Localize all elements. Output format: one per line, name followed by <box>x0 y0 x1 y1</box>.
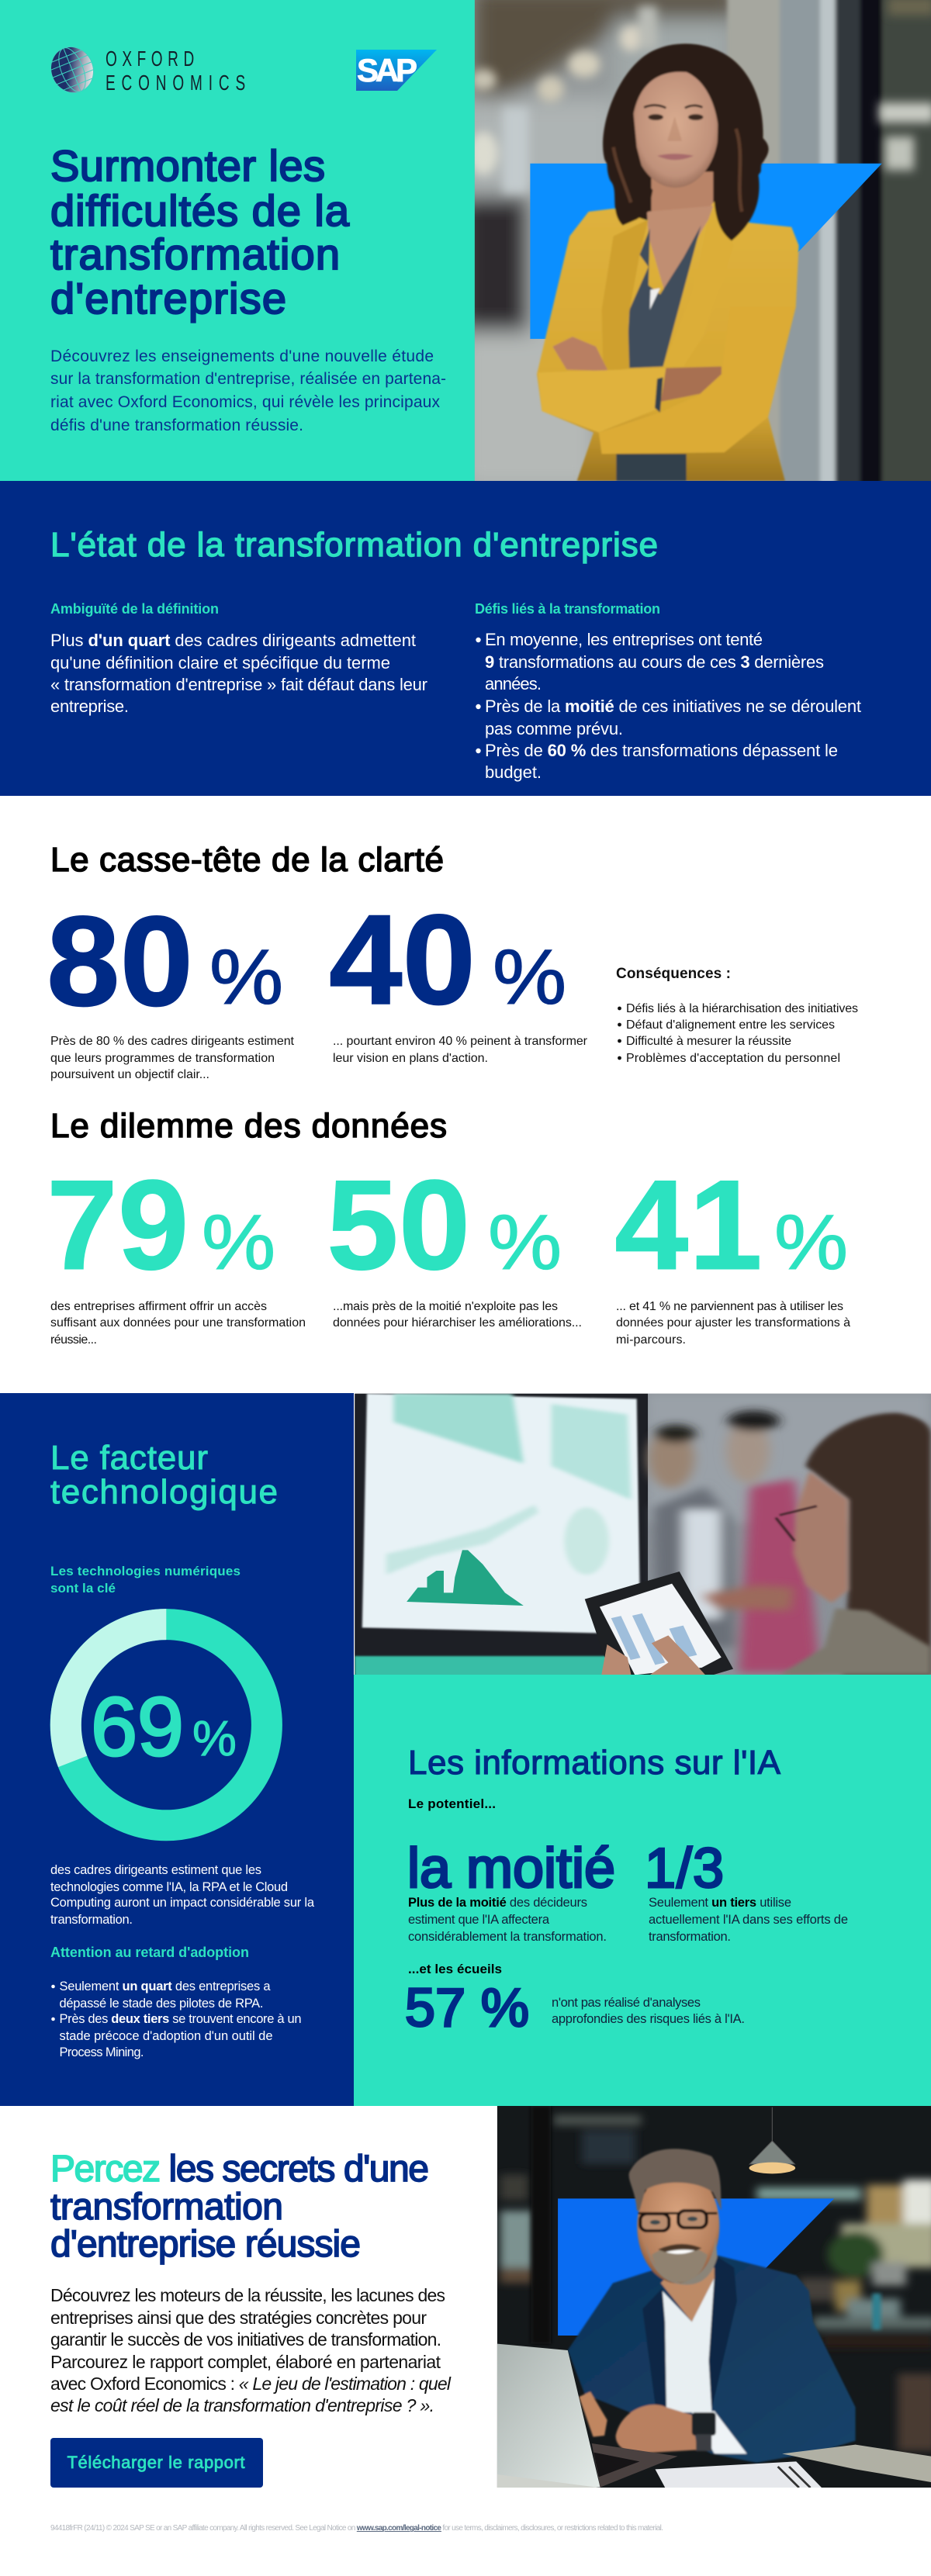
column: transformation challenges <box>475 601 861 782</box>
heading <box>50 2149 429 2265</box>
panel: clarity puzzle <box>47 841 858 1081</box>
caption: 50 % <box>333 1300 582 1329</box>
stat: one third: transformation. <box>649 1930 731 1944</box>
stat: 40 %: % <box>493 933 566 1020</box>
column: transformation challenges: années. <box>485 674 542 693</box>
body text: avec Oxford Economics : « Le jeu de l'estimation : quel <box>50 2374 452 2394</box>
photo: woman in yellow jacket <box>475 0 931 481</box>
stat: half: la moitié <box>407 1838 615 1900</box>
caption: 80 %: Près de 80 % des cadres dirigeants estiment <box>50 1035 295 1048</box>
body text <box>50 2285 452 2415</box>
heading: Les informations sur l'IA <box>408 1744 781 1782</box>
donut chart: 69 % <box>66 1624 267 1825</box>
body text: Découvrez les moteurs de la réussite, les lacunes des <box>50 2285 445 2305</box>
heading: Le facteur <box>50 1439 208 1477</box>
panel: state of transformation <box>0 481 931 796</box>
stat: 41 %: 41 <box>614 1153 763 1296</box>
stat: half: estiment que l'IA affectera <box>408 1913 550 1927</box>
title: Surmonter les <box>50 141 325 190</box>
caption: 80 %: poursuivent un objectif clair... <box>50 1068 209 1081</box>
stat: one third: actuellement l'IA dans ses efforts de <box>649 1913 848 1927</box>
stat: half <box>407 1838 615 1944</box>
caption: 79 %: suffisant aux données pour une transformation <box>50 1316 306 1329</box>
consequences list <box>616 966 858 1065</box>
adoption warning: Process Mining. <box>59 2045 144 2059</box>
consequences list: Défis liés à la hiérarchisation des initiatives <box>626 1002 858 1015</box>
stat: 80 % <box>47 890 283 1032</box>
consequences list: Défaut d'alignement entre les services <box>626 1018 835 1032</box>
column: transformation challenges: En moyenne, les entreprises ont tenté <box>485 630 763 649</box>
stat: 79 % <box>47 1153 275 1296</box>
logo: Oxford Economics: OXFORD <box>106 47 194 71</box>
stat: 80 %: 80 <box>47 890 193 1032</box>
stat: 79 %: % <box>202 1198 275 1285</box>
panel: data dilemma <box>47 1107 850 1347</box>
caption: 41 %: mi-parcours. <box>616 1333 686 1347</box>
donut description: des cadres dirigeants estiment que les <box>50 1863 261 1877</box>
accent: blue SAP wedge <box>530 164 882 339</box>
stat: 57 %: n'ont pas réalisé d'analyses <box>552 1996 701 2010</box>
stat: 41 %: % <box>774 1198 848 1285</box>
donut chart: 69 %: % <box>192 1710 237 1766</box>
logo: Oxford Economics <box>44 40 245 99</box>
column: definition ambiguity <box>50 601 427 716</box>
heading: L'état de la transformation d'entreprise <box>50 526 658 564</box>
stat: one third <box>645 1838 848 1944</box>
caption: 50 %: ...mais près de la moitié n'exploite pas les <box>333 1300 558 1313</box>
subheading: Les technologies numériques <box>50 1564 241 1578</box>
donut description: Computing auront un impact considérable sur la <box>50 1896 315 1910</box>
caption: 41 % <box>616 1300 850 1347</box>
stat: one third: 1/3 <box>645 1838 724 1900</box>
column: definition ambiguity: Ambiguïté de la définition <box>50 601 219 617</box>
caption: 50 %: données pour hiérarchiser les améliorations... <box>333 1316 582 1329</box>
column: transformation challenges: Défis liés à la transformation <box>475 601 660 617</box>
body text: garantir le succès de vos initiatives de transformation. <box>50 2329 441 2350</box>
column: transformation challenges: pas comme prévu. <box>485 719 623 738</box>
adoption warning: Seulement un quart des entreprises a <box>59 1980 271 1993</box>
title: transformation <box>50 230 340 278</box>
intro text: sur la transformation d'entreprise, réalisée en partena- <box>50 370 446 388</box>
stat: 41 % <box>614 1153 848 1296</box>
caption: 41 %: ... et 41 % ne parviennent pas à utiliser les <box>616 1300 843 1313</box>
donut chart: 69 %: 69 <box>91 1679 184 1773</box>
subheading <box>50 1564 241 1596</box>
footer legal note: 94418frFR (24/11) © 2024 SAP SE or an SAP affiliate company. All rights reserved. See Legal Notice on www.sap.com/legal-notice for use terms, disclaimers, disclosures, or restrictions related to this material. <box>50 2524 663 2533</box>
adoption warning: stade précoce d'adoption d'un outil de <box>59 2029 273 2043</box>
donut description <box>50 1863 315 1927</box>
donut description: transformation. <box>50 1913 133 1927</box>
column: transformation challenges: Près de 60 % des transformations dépassent le <box>485 741 838 760</box>
subheading: potential: Le potentiel... <box>408 1796 496 1811</box>
caption: 41 %: données pour ajuster les transformations à <box>616 1316 850 1329</box>
heading: Le casse-tête de la clarté <box>50 841 444 879</box>
column: transformation challenges: budget. <box>485 762 542 782</box>
donut description: technologies comme l'IA, la RPA et le Cloud <box>50 1880 288 1894</box>
adoption warning <box>50 1945 301 2059</box>
stat: half: Plus de la moitié des décideurs <box>408 1896 587 1910</box>
column: transformation challenges: Près de la moitié de ces initiatives ne se déroulent <box>485 697 861 716</box>
button: Télécharger le rapport <box>67 2453 245 2472</box>
stat: 50 % <box>327 1154 562 1297</box>
heading <box>50 1439 278 1511</box>
photo: smiling man with laptop <box>497 2106 931 2488</box>
heading: Percez les secrets d'une <box>50 2149 429 2190</box>
heading: technologique <box>50 1473 278 1511</box>
caption: 40 %: leur vision en plans d'action. <box>333 1052 488 1065</box>
body text: Parcourez le rapport complet, élaboré en partenariat <box>50 2352 441 2372</box>
intro text: défis d'une transformation réussie. <box>50 417 303 434</box>
intro text: Découvrez les enseignements d'une nouvelle étude <box>50 348 434 365</box>
body text: entreprises ainsi que des stratégies concrètes pour <box>50 2308 427 2328</box>
stat: one third: Seulement un tiers utilise <box>649 1896 791 1910</box>
title: difficultés de la <box>50 186 350 235</box>
stat: half: considérablement la transformation. <box>408 1930 607 1944</box>
panel: technology factor <box>0 1393 354 2106</box>
logo: Oxford Economics: ECONOMICS <box>106 71 245 95</box>
heading: Le dilemme des données <box>50 1107 447 1145</box>
stat: 40 %: 40 <box>329 888 476 1031</box>
title <box>50 141 350 323</box>
stat: 40 % <box>329 888 566 1031</box>
column: definition ambiguity: entreprise. <box>50 697 129 716</box>
column: definition ambiguity: Plus d'un quart des cadres dirigeants admettent <box>50 631 416 650</box>
intro text <box>50 348 446 434</box>
panel: AI insights <box>354 1675 931 2106</box>
stat: 57 % <box>405 1977 745 2038</box>
stat: 57 %: approfondies des risques liés à l'IA. <box>552 2012 745 2026</box>
consequences list: Conséquences : <box>616 966 731 982</box>
caption: 80 % <box>50 1035 295 1081</box>
consequences list: Difficulté à mesurer la réussite <box>626 1035 791 1048</box>
subheading: sont la clé <box>50 1581 116 1596</box>
intro text: riat avec Oxford Economics, qui révèle les principaux <box>50 393 441 411</box>
column: definition ambiguity: « transformation d'entreprise » fait défaut dans leur <box>50 675 427 694</box>
caption: 79 %: réussie... <box>50 1333 97 1347</box>
caption: 40 % <box>333 1035 588 1065</box>
caption: 79 % <box>50 1300 306 1347</box>
column: definition ambiguity: qu'une définition claire et spécifique du terme <box>50 653 390 673</box>
column: transformation challenges: 9 transformations au cours de ces 3 dernières <box>485 652 824 672</box>
adoption warning: Attention au retard d'adoption <box>50 1945 249 1960</box>
caption: 79 %: des entreprises affirment offrir un accès <box>50 1300 267 1313</box>
adoption warning: dépassé le stade des pilotes de RPA. <box>59 1997 264 2011</box>
subheading: pitfalls: ...et les écueils <box>408 1962 502 1976</box>
caption: 40 %: ... pourtant environ 40 % peinent à transformer <box>333 1035 588 1048</box>
heading: d'entreprise réussie <box>50 2224 361 2265</box>
panel: call to action <box>50 2102 931 2498</box>
stat: 50 %: % <box>488 1198 562 1285</box>
stat: 50 %: 50 <box>327 1154 470 1297</box>
heading: transformation <box>50 2187 283 2228</box>
stat: 79 %: 79 <box>47 1153 189 1296</box>
panel: hero <box>0 0 931 491</box>
caption: 80 %: que leurs programmes de transformation <box>50 1052 275 1065</box>
body text: est le coût réel de la transformation d'entreprise ? ». <box>50 2395 434 2415</box>
adoption warning: Près des deux tiers se trouvent encore à un <box>59 2012 301 2026</box>
button <box>50 2438 263 2488</box>
stat: 57 %: 57 % <box>405 1977 529 2038</box>
photo: team reviewing dashboards <box>355 1393 931 1675</box>
accent: blue SAP wedge <box>558 2198 834 2336</box>
logo: SAP <box>356 50 437 91</box>
consequences list: Problèmes d'acceptation du personnel <box>626 1052 840 1065</box>
title: d'entreprise <box>50 274 286 323</box>
logo: SAP: SAP <box>357 52 417 88</box>
stat: 80 %: % <box>209 933 283 1020</box>
